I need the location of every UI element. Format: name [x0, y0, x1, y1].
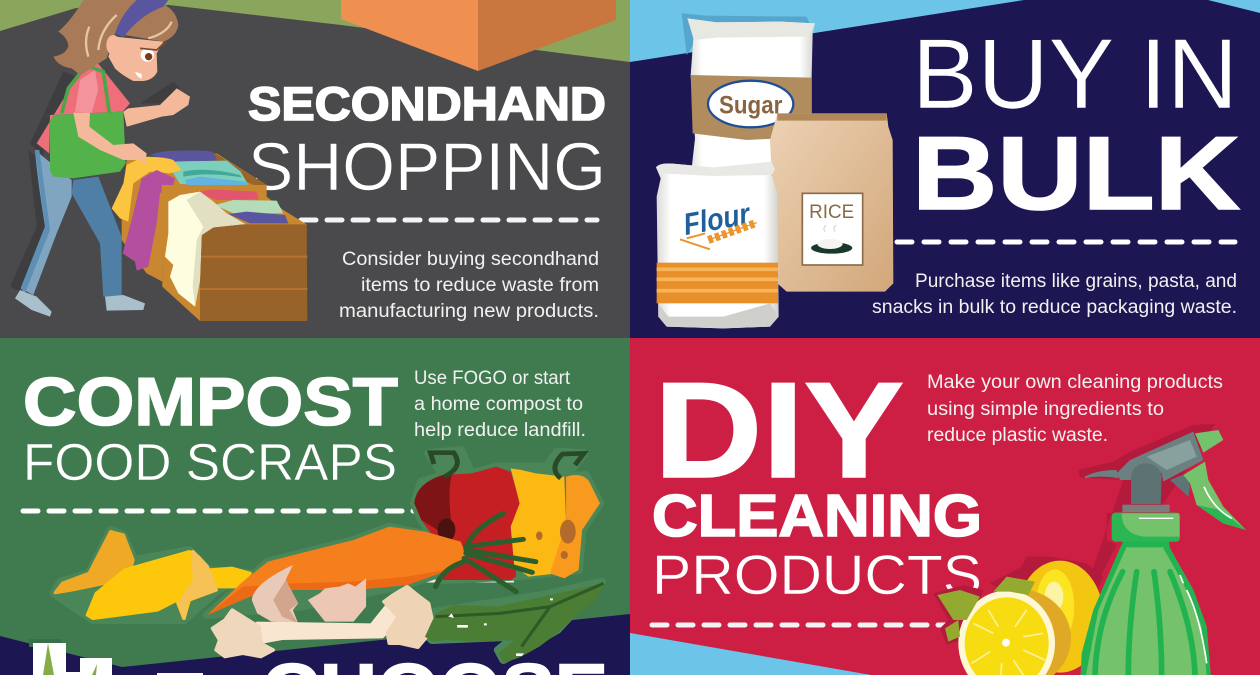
folded clothes in front crate — [197, 189, 288, 223]
panel: diy cleaning products — [630, 338, 1260, 675]
carrot — [207, 513, 536, 615]
text: secondhand description: items to reduce waste from — [361, 275, 599, 296]
heading: secondhand shopping: SHOPPING — [248, 129, 606, 205]
heading: diy cleaning products: CLEANING — [652, 483, 982, 549]
arms — [73, 88, 190, 165]
text: compost description: Use FOGO or start — [414, 368, 571, 389]
spray head — [1085, 430, 1246, 530]
text: bulk description: Purchase items like grains, pasta, and — [915, 271, 1237, 292]
heading: compost food scraps — [23, 364, 398, 492]
shirt — [37, 62, 130, 153]
heading: buy in bulk: BUY IN — [912, 18, 1238, 129]
back lemon — [1017, 561, 1103, 673]
back crate — [122, 153, 267, 282]
label: flour: Flour — [681, 197, 754, 242]
heading: diy cleaning products: PRODUCTS — [652, 543, 982, 606]
text: diy description: reduce plastic waste. — [927, 425, 1108, 446]
heading: diy cleaning products — [652, 354, 982, 606]
label: rice: RICE — [809, 202, 854, 223]
text: diy description: using simple ingredients to — [927, 399, 1164, 420]
icon: wheat — [680, 223, 757, 249]
icon: grass and white blocks (cropped) — [29, 639, 203, 675]
jeans — [21, 150, 122, 297]
panel: buy in bulk — [630, 0, 1260, 338]
illustration: woman browsing clothes crates — [10, 0, 307, 321]
text: compost description — [414, 368, 586, 441]
halo behind food — [54, 450, 602, 660]
shadow halo — [933, 424, 1215, 645]
icon: cardboard box — [341, 0, 616, 71]
peppers — [414, 453, 600, 580]
bottle — [1081, 505, 1211, 675]
heading: buy in bulk — [912, 18, 1240, 232]
text: bulk description: snacks in bulk to reduce packaging waste. — [872, 297, 1237, 318]
bone — [212, 587, 432, 657]
panel: compost food scraps — [0, 338, 630, 675]
cut lemon — [958, 589, 1071, 675]
heading: secondhand shopping: SECONDHAND — [248, 77, 606, 130]
heading: buy in bulk: BULK — [912, 116, 1240, 232]
panel: secondhand shopping — [0, 0, 630, 338]
illustration: sugar bag — [682, 13, 815, 168]
heading: compost food scraps: COMPOST — [23, 364, 398, 440]
cream garment — [165, 192, 245, 307]
head — [53, 0, 178, 81]
text: diy description: Make your own cleaning products — [927, 372, 1223, 393]
shopping bag — [50, 112, 126, 178]
shoes — [15, 290, 145, 317]
shadow behind woman — [10, 72, 180, 295]
front crate — [162, 185, 307, 321]
illustration: food scraps — [54, 450, 604, 663]
yellow garment — [112, 157, 182, 222]
text: secondhand description: Consider buying secondhand — [342, 249, 599, 270]
heading: diy cleaning products: DIY — [654, 354, 904, 506]
folded clothes in back crate — [150, 151, 248, 185]
illustration: spray bottle and lemons — [933, 424, 1246, 675]
label: sugar: Sugar — [719, 91, 782, 119]
egg shells — [252, 565, 366, 623]
text: secondhand description — [339, 249, 599, 322]
text: compost description: help reduce landfill. — [414, 420, 586, 441]
magenta garment — [123, 170, 175, 271]
wilted leaf — [425, 583, 604, 663]
text: compost description: a home compost to — [414, 394, 583, 415]
heading: compost food scraps: FOOD SCRAPS — [23, 434, 397, 492]
heading: secondhand shopping — [248, 77, 606, 205]
text: secondhand description: manufacturing new products. — [339, 301, 599, 322]
text: diy description — [927, 372, 1223, 446]
lemon leaves — [937, 577, 1035, 642]
illustration: rice bag — [770, 113, 893, 292]
text: bulk description — [872, 271, 1237, 318]
banana peel — [55, 532, 250, 618]
illustration: flour bag — [656, 162, 779, 328]
